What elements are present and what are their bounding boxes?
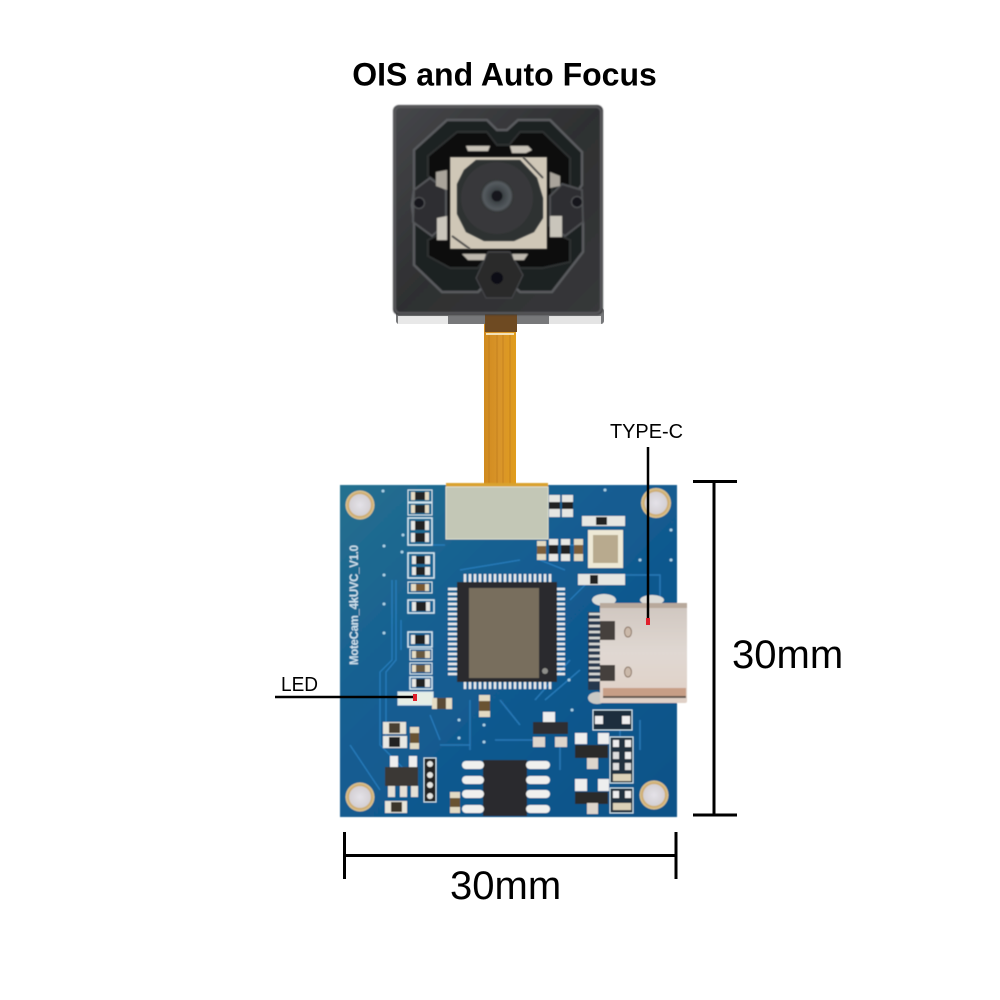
- crystal oscillator: [588, 530, 623, 568]
- title: OIS and Auto Focus: [352, 56, 657, 92]
- passive components: top right: [537, 495, 625, 585]
- vias: [382, 488, 672, 744]
- lens barrel: [452, 157, 543, 249]
- silkscreen board name: MoteCam_4kUVC_V1.0: [349, 545, 361, 665]
- traces: [350, 545, 660, 790]
- TYPE-C leader line: [646, 447, 650, 625]
- mounting holes: [346, 488, 671, 812]
- LED component: [398, 692, 452, 709]
- SOP-8 chip: [462, 760, 550, 816]
- camera base strip: [396, 308, 604, 324]
- LED leader line: [275, 694, 417, 701]
- chip pins: [465, 574, 550, 582]
- main chip: [448, 574, 565, 689]
- regulator SOT-223: [385, 756, 418, 797]
- height dimension: [693, 481, 843, 815]
- height dimension: 30mm: [732, 633, 843, 677]
- LED label: LED: [281, 674, 318, 696]
- shield block: [446, 483, 548, 539]
- lens carrier plate: [450, 157, 547, 249]
- transistors and passives: lower right: [533, 710, 633, 814]
- passive components: lower left: [383, 695, 490, 813]
- passive components: left column: [408, 490, 434, 689]
- Type-C connector: [588, 594, 687, 704]
- circuit board: [340, 483, 687, 817]
- board substrate: [340, 485, 677, 817]
- TYPE-C label: TYPE-C: [610, 421, 683, 443]
- width dimension: 30mm: [450, 864, 561, 908]
- width dimension: [344, 832, 676, 908]
- camera module: [393, 105, 604, 486]
- flex cable: [484, 314, 517, 486]
- camera housing: [393, 105, 603, 315]
